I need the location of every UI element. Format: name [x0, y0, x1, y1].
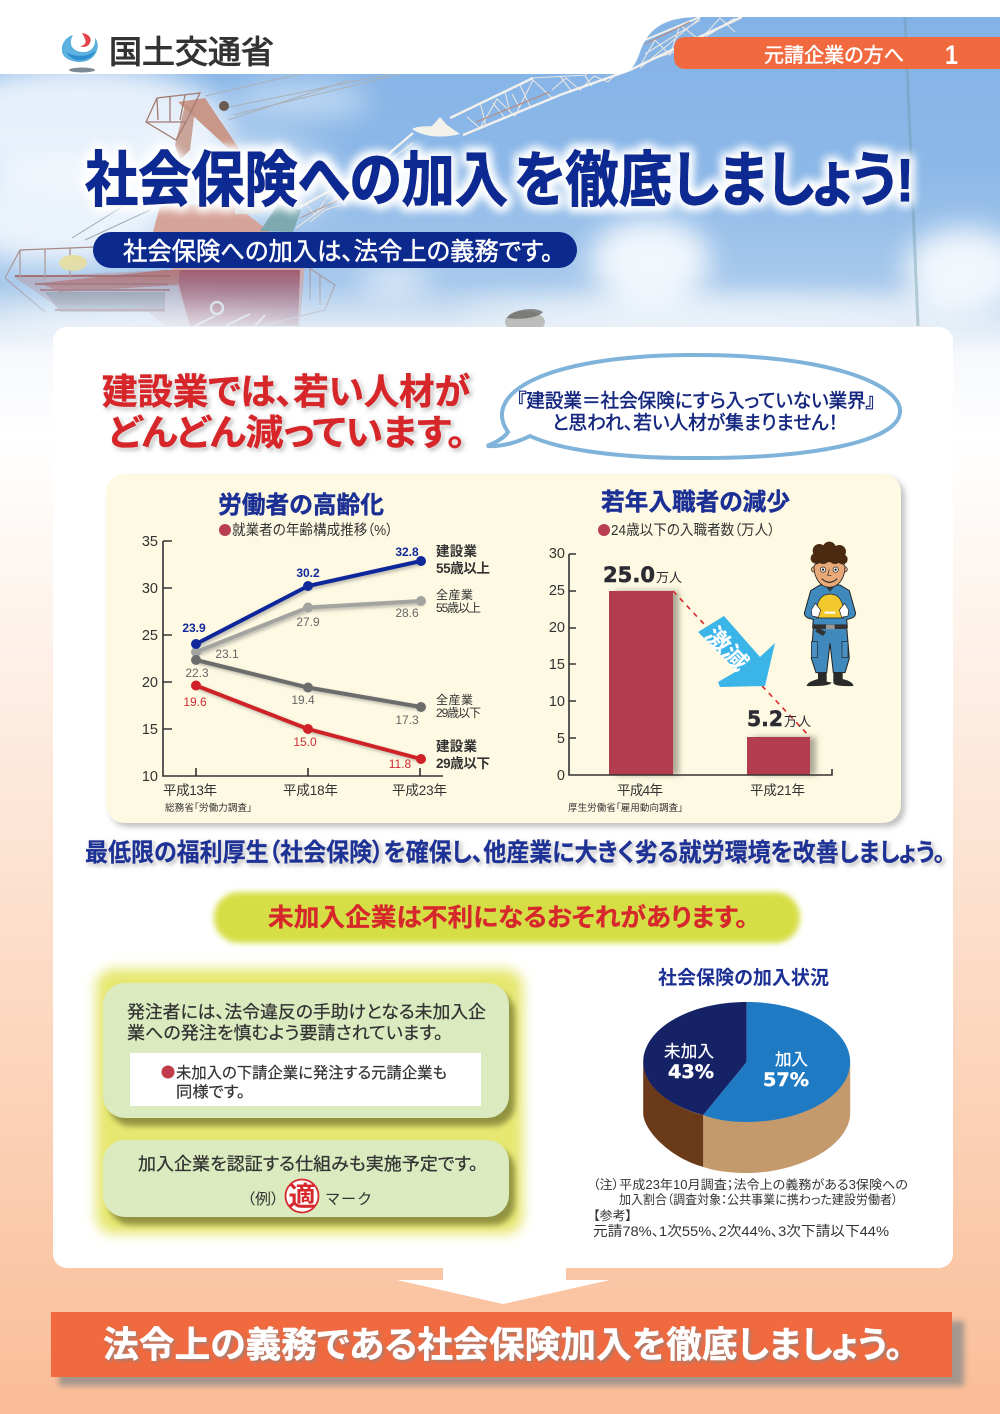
value labels: 11.8 [389, 757, 412, 771]
crane body [5, 74, 400, 326]
value labels: 23.1 [215, 647, 239, 661]
arrow: sharp decrease: 激減 [700, 622, 753, 676]
title: 社会保険への加入 [85, 147, 508, 214]
series points [191, 556, 426, 764]
axes: 30 [142, 581, 158, 597]
value labels: 22.3 [185, 666, 209, 680]
axes: 平成21年 [750, 783, 805, 798]
axes: 15 [142, 722, 158, 738]
pole [905, 17, 918, 326]
footnote [593, 1177, 908, 1239]
axes: 25 [142, 628, 158, 644]
bars [609, 591, 810, 775]
axes: 0 [557, 768, 565, 784]
axes: 20 [142, 675, 158, 691]
axes: 5 [557, 731, 565, 747]
value labels: 32.8 [395, 545, 419, 559]
chart heading: 労働者の高齢化 [218, 492, 384, 519]
tab: audience: 元請企業の方へ [764, 44, 904, 67]
photo: sky and crane [0, 17, 1000, 334]
series lines [196, 561, 421, 759]
bar values: 5.2 [747, 707, 783, 731]
axes: 30 [549, 546, 565, 562]
box: certification notice: 加入企業を認証する仕組みも実施予定です。 [138, 1154, 478, 1174]
line chart: ageing workers [142, 492, 490, 814]
title [85, 147, 914, 214]
axes: 平成13年 [163, 783, 217, 798]
panel: charts [106, 474, 905, 827]
value labels: 19.6 [183, 695, 207, 709]
series labels: 29歳以下 [436, 755, 490, 771]
footnote: 元請78%、1次55%、2次44%、3次下請以下44% [593, 1223, 889, 1239]
footnote: （注）平成23年10月調査；法令上の義務がある3保険への [593, 1177, 908, 1192]
series labels: 建設業 [436, 544, 478, 559]
tower [153, 203, 305, 326]
axes: 平成18年 [283, 783, 338, 798]
statement: improve working conditions: 最低限の福利厚生（社会保険）を確保し、他産業に大きく劣る就労環境を改善しましょう。 [85, 839, 945, 867]
bar values: 万人 [784, 714, 811, 729]
pie chart: enrolment status [593, 967, 908, 1239]
cables [205, 74, 400, 120]
heading: young workers decreasing: どんどん減っています。 [108, 412, 466, 453]
value labels: 28.6 [395, 606, 419, 620]
box: certification notice [103, 1140, 515, 1225]
icon: logo mark [62, 33, 98, 72]
banner: disadvantage warning [214, 892, 800, 943]
axes [142, 534, 447, 798]
axes: 35 [142, 534, 158, 550]
upper mast [178, 98, 240, 150]
axes: 10 [142, 769, 158, 785]
value labels: 27.9 [296, 615, 320, 629]
box: certification notice: （例） [247, 1191, 279, 1208]
pie side [643, 1062, 850, 1173]
callout: speech bubble [487, 355, 900, 458]
chart heading: 社会保険の加入状況 [658, 967, 829, 989]
title: を徹底しましょう! [514, 147, 914, 214]
axes: 平成23年 [392, 783, 447, 798]
bar values [603, 563, 811, 731]
series labels: 29歳以下 [436, 706, 481, 720]
dashed trend line [673, 591, 810, 737]
axes: 20 [549, 620, 565, 636]
icon: worker holding helmet [804, 542, 856, 686]
lamp [505, 309, 545, 333]
callout: speech bubble: 『建設業＝社会保険にすら入っていない業界』 [517, 390, 875, 412]
value labels: 15.0 [293, 735, 317, 749]
pie labels: 43% [668, 1061, 714, 1083]
series labels: 55歳以上 [436, 560, 490, 576]
logo: ministry [62, 33, 274, 72]
tab: audience [674, 37, 1000, 70]
pie labels: 57% [763, 1069, 809, 1091]
panel: main card [53, 327, 953, 1268]
series labels: 全産業 [436, 693, 473, 707]
axes: 10 [549, 694, 565, 710]
callout: speech bubble: と思われ、若い人材が集まりません！ [552, 412, 838, 434]
value labels: 23.9 [182, 621, 206, 635]
source: 厚生労働省「雇用動向調査」 [568, 802, 683, 814]
bar values: 万人 [656, 570, 682, 585]
arrow: down to conclusion [397, 1266, 610, 1304]
heading: young workers decreasing [102, 371, 470, 453]
axes: 25 [549, 583, 565, 599]
axes: 15 [549, 657, 565, 673]
series labels [436, 544, 490, 771]
slice: enrolled [703, 1002, 850, 1122]
axes [549, 546, 832, 798]
value labels: 19.4 [291, 693, 315, 707]
ministry name: 国土交通省 [109, 34, 274, 70]
boom saddle [412, 117, 460, 137]
value labels: 30.2 [296, 566, 320, 580]
footnote: 加入割合（調査対象：公共事業に携わった建設労働者） [619, 1192, 898, 1207]
series labels: 全産業 [436, 588, 473, 602]
clouds [0, 65, 1000, 334]
source: 総務省「労働力調査」 [165, 802, 252, 814]
slice: not enrolled [643, 1002, 747, 1115]
icon: compliance mark: 適 [288, 1182, 316, 1212]
box: order notice: 業への発注を慎むよう要請されています。 [127, 1023, 443, 1043]
tab: audience: 1 [945, 40, 958, 70]
heading: young workers decreasing: 建設業では、若い人材が [102, 371, 470, 412]
banner: disadvantage warning: 未加入企業は不利になるおそれがあります。 [268, 903, 748, 932]
machinery deck [14, 270, 190, 326]
box: order notice: 同様です。 [176, 1083, 245, 1101]
banner: conclusion [51, 1312, 964, 1386]
bar chart: young entrants [549, 489, 856, 814]
subtitle pill: 社会保険への加入は、法令上の義務です。 [123, 238, 553, 266]
chart subtitle: 24歳以下の入職者数（万人） [611, 522, 775, 539]
value labels [182, 545, 419, 771]
footnote: 【参考】 [593, 1209, 632, 1223]
chart heading: 若年入職者の減少 [601, 489, 790, 516]
value labels: 17.3 [395, 713, 419, 727]
white top band [0, 0, 1000, 74]
box: order notice: 未加入の下請企業に発注する元請企業も [176, 1064, 447, 1082]
panel: notices [96, 969, 523, 1234]
arrow: sharp decrease [698, 616, 775, 687]
boom lattice [296, 18, 735, 228]
series labels: 建設業 [436, 739, 478, 754]
box: certification notice: マーク [326, 1191, 371, 1208]
axes: 平成4年 [617, 783, 663, 798]
box: order notice [103, 983, 515, 1126]
pie labels: 未加入 [664, 1042, 714, 1061]
series labels: 55歳以上 [436, 601, 481, 615]
pie labels: 加入 [775, 1050, 808, 1069]
pie labels [664, 1042, 809, 1091]
box: order notice: 発注者には、法令違反の手助けとなる未加入企 [127, 1002, 486, 1022]
bar values: 25.0 [603, 563, 655, 587]
chart subtitle: 就業者の年齢構成推移（%） [232, 522, 393, 539]
banner: conclusion: 法令上の義務である社会保険加入を徹底しましょう。 [103, 1324, 903, 1365]
